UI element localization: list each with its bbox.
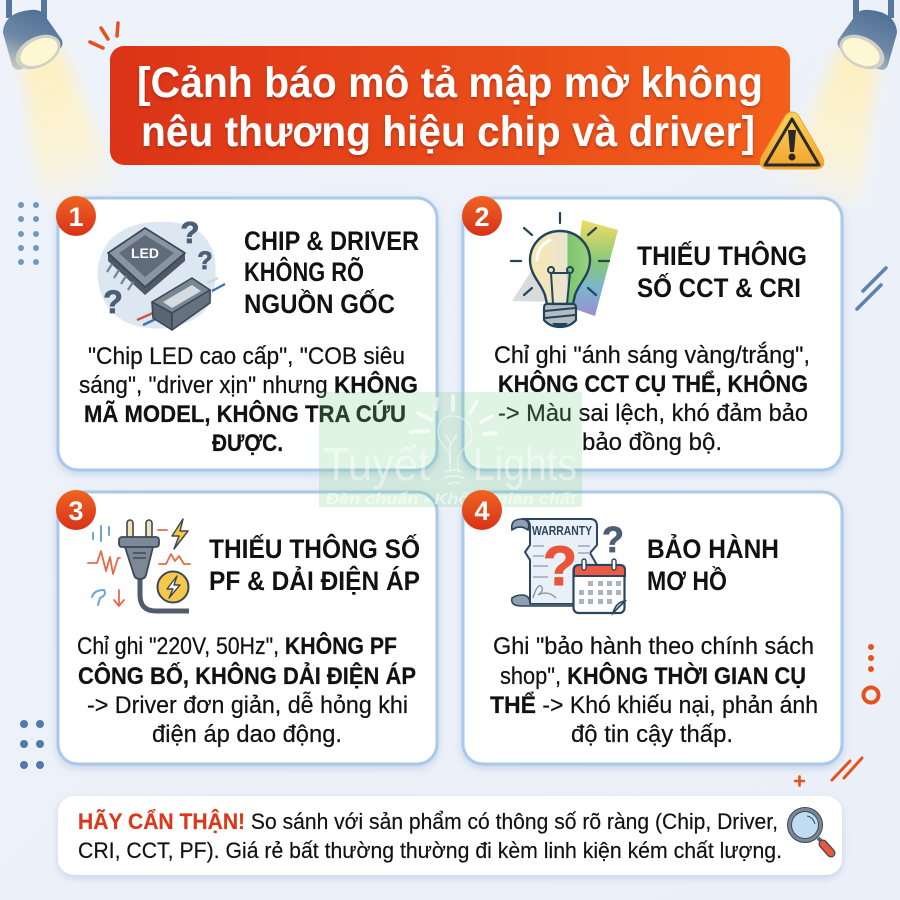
body text 1 (79, 343, 418, 457)
icon: warranty scroll with calendar: ? (543, 534, 577, 597)
panel 1: chip and driver (56, 196, 437, 470)
badge 1: 1 (68, 202, 84, 232)
title banner: nêu thương hiệu chip và driver] (141, 108, 755, 156)
icon: LED chip, driver and question marks: ? (103, 284, 123, 320)
icon: warning triangle (760, 112, 824, 169)
body text 3 (77, 632, 416, 748)
icon: power plug with voltage waves (88, 519, 190, 611)
icon: LED chip, driver and question marks (98, 215, 225, 330)
title banner (110, 46, 790, 165)
body text 3: điện áp dao động. (152, 721, 342, 748)
icon: warranty scroll with calendar: WARRANTY (532, 523, 592, 538)
body text 3: CÔNG BỐ, KHÔNG DẢI ĐIỆN ÁP (78, 661, 416, 690)
spotlight: left (3, 0, 125, 205)
body text 1: "Chip LED cao cấp", "COB siêu (88, 343, 405, 370)
icon: light bulb with colour spectrum (511, 213, 618, 327)
heading 4 (647, 534, 779, 596)
decorative lines: right blue (857, 268, 886, 309)
heading 1: NGUỒN GỐC (244, 289, 395, 319)
heading 2: THIẾU THÔNG (637, 241, 807, 271)
body text 2: Chỉ ghi "ánh sáng vàng/trắng", (494, 342, 810, 369)
body text 4: Ghi "bảo hành theo chính sách (493, 633, 814, 660)
panel 4: vague warranty (463, 492, 842, 764)
panel 2: CCT and CRI (462, 196, 842, 470)
panel 3: PF and voltage range (56, 490, 437, 764)
heading 3: PF & DẢI ĐIỆN ÁP (209, 566, 420, 596)
icon: LED chip, driver and question marks: ? (181, 215, 199, 250)
body text 2: bảo đồng bộ. (582, 429, 722, 456)
watermark: Tuyết Lights: Tuyết (323, 438, 430, 490)
heading 1: KHÔNG RÕ (244, 257, 364, 287)
decorative dots: left bottom (20, 720, 44, 769)
body text 3: -> Driver đơn giản, dễ hỏng khi (87, 692, 408, 719)
body text 4: độ tin cậy thấp. (571, 721, 733, 748)
heading 2 (637, 241, 807, 303)
decorative dots: left top (18, 202, 39, 265)
body text 4: THỂ -> Khó khiếu nại, phản ánh (490, 691, 818, 719)
heading 3 (209, 534, 420, 596)
body text 1: sáng", "driver xịn" nhưng KHÔNG (79, 371, 418, 399)
badge 4 (462, 490, 502, 530)
icon: LED chip, driver and question marks: ? (197, 247, 213, 275)
footer callout: CRI, CCT, PF). Giá rẻ bất thường thường đi kèm linh kiện kém chất lượng. (78, 838, 782, 863)
heading 2: SỐ CCT & CRI (637, 273, 801, 303)
body text 3: Chỉ ghi "220V, 50Hz", KHÔNG PF (77, 632, 397, 660)
body text 2: KHÔNG CCT CỤ THỂ, KHÔNG (498, 370, 808, 398)
watermark: Tuyết Lights: Đèn chuẩn - Không gian chất (326, 490, 577, 508)
footer callout: HÃY CẨN THẬN! So sánh với sản phẩm có thông số rõ ràng (Chip, Driver, (78, 809, 778, 834)
decorative strokes: orange slashes and plus (795, 758, 862, 786)
heading 3: THIẾU THÔNG SỐ (209, 534, 420, 564)
badge 2 (462, 196, 502, 236)
heading 4: BẢO HÀNH (647, 534, 779, 564)
icon: magnifying glass (788, 808, 831, 853)
decorative dots and ring: right orange (864, 644, 878, 702)
watermark: Tuyết Lights: Lights (473, 438, 577, 490)
heading 1 (244, 226, 419, 319)
spotlight: right (775, 0, 897, 205)
body text 1: MÃ MODEL, KHÔNG TRA CỨU (84, 400, 406, 428)
footer callout (58, 796, 842, 875)
badge 2: 2 (474, 202, 490, 232)
body text 2 (494, 342, 810, 456)
body text 1: ĐƯỢC. (212, 430, 283, 457)
body text 4: shop", KHÔNG THỜI GIAN CỤ (500, 662, 806, 690)
badge 4: 4 (474, 496, 490, 526)
title banner: [Cảnh báo mô tả mập mờ không (137, 59, 763, 107)
watermark: Tuyết Lights (319, 392, 582, 508)
icon: warranty scroll with calendar: ? (602, 519, 624, 560)
badge 3 (56, 490, 96, 530)
body text 2: -> Màu sai lệch, khó đảm bảo (498, 400, 808, 427)
heading 1: CHIP & DRIVER (244, 226, 419, 256)
icon: warranty scroll with calendar (512, 519, 625, 613)
decorative sparks near title (90, 23, 118, 48)
body text 4 (490, 633, 818, 748)
badge 3: 3 (68, 496, 84, 526)
heading 4: MƠ HỒ (647, 566, 727, 596)
icon: LED chip, driver and question marks: LED (131, 245, 159, 261)
badge 1 (56, 196, 96, 236)
